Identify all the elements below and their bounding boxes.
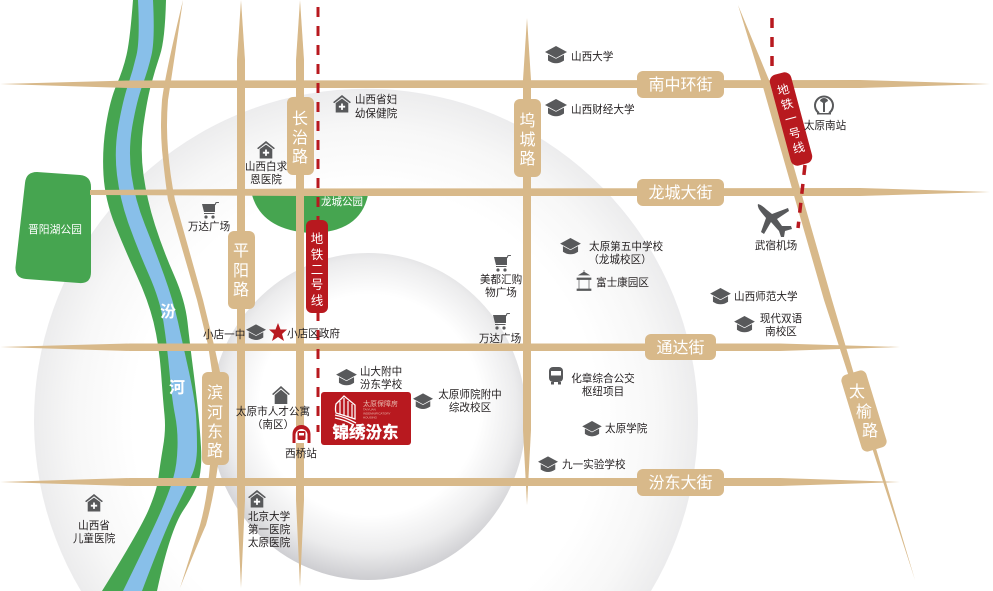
POI: 武宿机场 [755,204,797,252]
POI: 西桥站: 西桥站 [285,447,317,460]
road label: 长治路 [287,97,314,175]
road label: 太榆路: 太 [849,383,865,401]
road label: 太榆路: 榆 [856,403,872,421]
metro label: 地铁二号线: 号 [311,278,323,292]
POI: 北京大学第一医院太原医院: 第一医院 [248,523,291,536]
metro label: 地铁二号线: 铁 [311,248,324,262]
park: 晋阳湖公园: 晋阳湖公园 [28,223,82,236]
POI: 现代双语南校区: 现代双语 [760,313,803,325]
POI: 北京大学第一医院太原医院: 北京大学 [248,510,290,523]
POI: 山西白求恩医院: 恩医院 [250,173,282,186]
river: 汾河 [102,0,201,591]
POI: 现代双语南校区 [734,313,803,338]
metro label: 地铁一号线: 一 [783,111,799,127]
POI: 美都汇购物广场 [480,255,522,299]
park: 晋阳湖公园 [15,172,91,283]
POI: 山西师范大学: 山西师范大学 [734,290,798,303]
road label: 滨河东路 [202,372,229,465]
river label: 河: 河 [169,379,185,397]
POI: 化章综合公交枢纽项目: 化章综合公交 [571,372,635,385]
project logo: 锦绣汾东: 太原保障房 [363,399,398,408]
road label: 滨河东路: 路 [207,442,223,460]
project logo: 锦绣汾东: INDEMNIFICATORY [363,412,391,416]
road label: 南中环街: 南中环街 [648,76,713,94]
road label: 龙城大街: 龙城大街 [648,184,713,202]
metro label: 地铁二号线 [306,220,328,313]
metro label: 地铁一号线: 铁 [780,96,795,113]
river label: 汾: 汾 [160,303,176,321]
road label: 平阳路 [228,231,255,309]
POI: 山大附中汾东学校 [336,365,403,391]
road label: 长治路: 长 [292,110,308,128]
POI: 万达广场 west [188,202,230,233]
road label: 太榆路: 路 [862,422,878,440]
POI: 山西大学: 山西大学 [571,50,613,63]
logo icon: buildings [335,396,356,424]
road label: 南中环街 [637,71,724,98]
metro line 1 dashed [772,18,805,228]
POI: 太原第五中学校: 太原第五中学校 [589,240,664,253]
POI: 化章综合公交枢纽项目: 枢纽项目 [582,385,624,398]
POI: 九一实验学校 [538,456,626,472]
POI: 万达广场 west: 万达广场 [188,220,230,233]
metro label: 地铁二号线: 线 [311,294,324,308]
project logo: 锦绣汾东 [321,392,411,445]
POI: 山西省妇幼保健院 [333,93,398,120]
POI: 小店区政府 [269,323,340,341]
POI: 西桥站 [285,425,317,460]
POI: 北京大学第一医院太原医院: 太原医院 [248,536,291,549]
POI: 美都汇购物广场: 物广场 [485,286,517,299]
metro label: 地铁一号线: 号 [787,125,802,142]
POI: 现代双语南校区: 南校区 [765,325,797,338]
POI: 山西省儿童医院 [73,494,116,545]
POI: 小店一中: 小店一中 [203,328,245,341]
road label: 坞城路: 城 [519,131,536,149]
road label: 坞城路: 路 [519,150,536,168]
road label: 龙城大街 [637,179,724,206]
POI: 山西省妇幼保健院: 幼保健院 [355,107,398,120]
background circle: outer [34,89,698,591]
POI: 太原第五中学校: （龙城校区） [588,253,652,266]
metro line 2 dashed [316,7,320,432]
POI: 美都汇购物广场: 美都汇购 [480,273,522,286]
road label: 汾东大街: 汾东大街 [648,474,713,492]
POI: 北京大学第一医院太原医院 [248,490,291,549]
metro label: 地铁二号线: 二 [311,263,323,277]
POI: 山西省儿童医院: 山西省 [78,519,110,532]
POI: 山西大学 [545,46,613,63]
road label: 通达街: 通达街 [656,339,705,357]
POI: 山西白求恩医院: 山西白求 [245,160,288,173]
road label: 通达街 [645,334,716,360]
road label: 长治路: 路 [292,148,308,166]
metro label: 地铁一号线: 地 [776,82,791,98]
project logo: 锦绣汾东: HOUSING [363,416,378,420]
road label: 长治路: 治 [292,129,308,147]
park: 龙城公园: 龙城公园 [321,195,363,208]
POI: 太原南站 [804,97,847,132]
project logo: 锦绣汾东: TAIYUAN [363,408,376,412]
POI: 太原师院附中综改校区 [413,388,502,414]
POI: 小店区政府: 小店区政府 [287,327,340,340]
POI: 小店一中 [203,324,266,341]
road label: 滨河东路: 东 [207,423,223,441]
background circle: inner [210,253,526,580]
POI: 山西师范大学 [710,288,798,304]
park: 龙城公园 [252,195,368,233]
POI: 山大附中汾东学校: 汾东学校 [360,378,403,391]
road label: 滨河东路: 河 [207,404,223,422]
POI: 太原市人才公寓 [236,386,310,431]
POI: 太原第五中学校 [560,238,664,266]
POI: 万达广场 east: 万达广场 [479,332,521,345]
POI: 山西省妇幼保健院: 山西省妇 [355,93,397,106]
metro label: 地铁二号线: 地 [311,232,324,246]
road label: 平阳路: 路 [233,281,249,299]
POI: 山西财经大学: 山西财经大学 [571,103,635,116]
POI: 太原市人才公寓: 太原市人才公寓 [236,405,310,418]
road label: 平阳路: 阳 [233,262,249,280]
POI: 富士康园区 [577,270,649,290]
project logo: 锦绣汾东: 锦绣汾东 [332,419,398,443]
POI: 太原师院附中综改校区: 太原师院附中 [438,388,502,401]
POI: 山大附中汾东学校: 山大附中 [360,365,402,378]
POI: 武宿机场: 武宿机场 [755,239,797,252]
POI: 太原学院 [582,421,648,436]
metro label: 地铁一号线: 线 [791,140,806,156]
metro label: 地铁一号线 [768,71,814,167]
road label: 平阳路: 平 [233,243,249,260]
road label: 坞城路 [514,99,541,177]
POI: 富士康园区: 富士康园区 [596,276,649,289]
POI: 九一实验学校: 九一实验学校 [562,458,626,471]
POI: 太原师院附中综改校区: 综改校区 [449,401,492,414]
POI: 山西省儿童医院: 儿童医院 [73,532,116,545]
POI: 太原南站: 太原南站 [804,119,847,132]
road label: 滨河东路: 滨 [207,384,223,402]
POI: 太原学院: 太原学院 [605,422,648,435]
POI: 山西财经大学 [545,99,635,116]
road label: 坞城路: 坞 [519,112,536,130]
road label: 汾东大街 [637,469,724,496]
POI: 太原市人才公寓: （南区） [252,418,294,431]
POI: 山西白求恩医院 [245,141,288,186]
POI: 化章综合公交枢纽项目 [549,367,635,398]
road label: 太榆路 [830,366,896,456]
POI: 万达广场 east [479,313,521,345]
